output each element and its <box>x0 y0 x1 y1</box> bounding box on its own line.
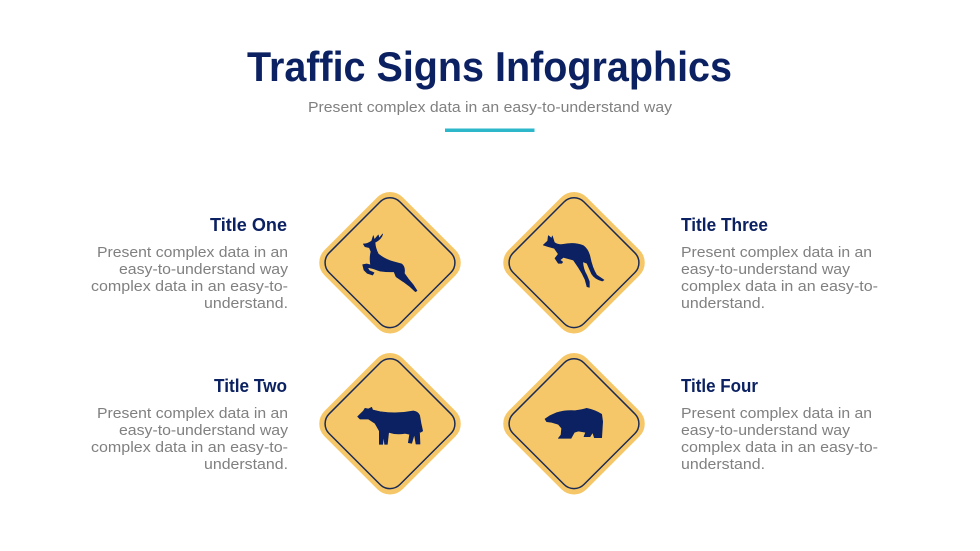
body text: title two: complex data in an easy-to- <box>91 439 288 456</box>
body text: title four: understand. <box>681 456 765 473</box>
icon: deer silhouette <box>363 234 417 292</box>
body text: title two: understand. <box>204 456 288 473</box>
icon: bear crossing sign <box>496 345 652 502</box>
body text: title three <box>681 244 878 312</box>
heading: title one: Title One <box>210 215 287 235</box>
icon: kangaroo silhouette <box>543 236 604 287</box>
icon: deer crossing sign <box>312 184 468 341</box>
heading: title four: Title Four <box>681 376 758 396</box>
title: Traffic Signs Infographics <box>247 43 732 90</box>
body text: title one: understand. <box>204 295 288 312</box>
icon: bear silhouette <box>545 408 603 438</box>
body text: title four: complex data in an easy-to- <box>681 439 878 456</box>
icon: cow crossing sign <box>312 345 468 502</box>
panel: title two text <box>91 376 289 473</box>
body text: title four: Present complex data in an <box>681 405 872 422</box>
body text: title one: Present complex data in an <box>97 244 288 261</box>
body text: title two <box>91 405 289 473</box>
body text: title two: easy-to-understand way <box>119 422 289 439</box>
icon: kangaroo crossing sign <box>496 184 652 341</box>
accent bar <box>445 128 534 132</box>
panel: title one text <box>91 215 289 312</box>
body text: title three: complex data in an easy-to- <box>681 278 878 295</box>
body text: title one <box>91 244 289 312</box>
heading: title three: Title Three <box>681 215 768 235</box>
body text: title three: easy-to-understand way <box>681 261 851 278</box>
body text: title four <box>681 405 878 473</box>
body text: title one: easy-to-understand way <box>119 261 289 278</box>
body text: title three: understand. <box>681 295 765 312</box>
body text: title three: Present complex data in an <box>681 244 872 261</box>
subtitle: Present complex data in an easy-to-understand way <box>308 99 673 116</box>
panel: title three text <box>681 215 878 312</box>
icon: cow silhouette <box>358 407 423 444</box>
body text: title two: Present complex data in an <box>97 405 288 422</box>
body text: title four: easy-to-understand way <box>681 422 851 439</box>
heading: title two: Title Two <box>214 376 287 396</box>
panel: title four text <box>681 376 878 473</box>
body text: title one: complex data in an easy-to- <box>91 278 288 295</box>
